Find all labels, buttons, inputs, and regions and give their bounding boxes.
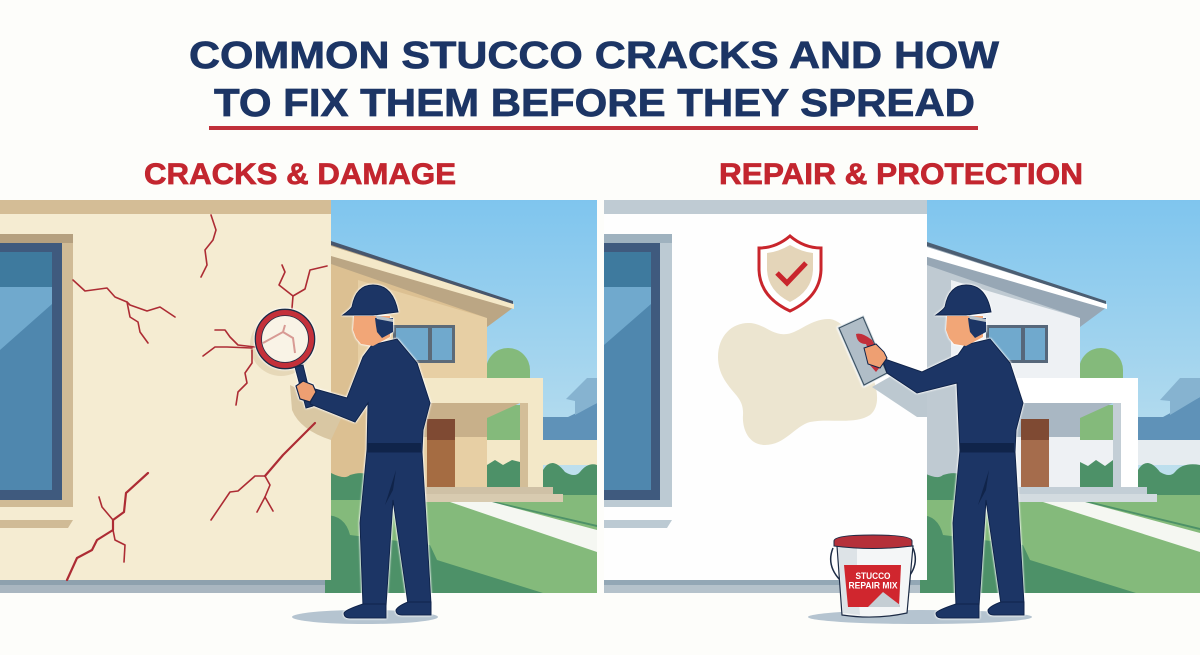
head	[353, 316, 390, 346]
panel: repair and protection	[604, 200, 1200, 624]
heading: repair and protection: REPAIR & PROTECTION	[719, 158, 1083, 191]
head	[946, 316, 983, 346]
icon: trowel	[839, 317, 887, 385]
worker with trowel	[839, 285, 1024, 618]
title: COMMON STUCCO CRACKS AND HOW	[189, 35, 999, 77]
background house scene right	[920, 200, 1200, 593]
window right	[604, 234, 672, 528]
applied patch	[718, 319, 877, 445]
window left	[0, 234, 73, 528]
icon: stucco repair mix bucket: STUCCO	[856, 571, 890, 581]
wall shadow from worker	[290, 385, 345, 440]
panel: cracks and damage	[0, 200, 597, 624]
worker with magnifying glass	[255, 285, 431, 618]
torso and arm	[882, 339, 1023, 452]
title: TO FIX THEM BEFORE THEY SPREAD	[214, 82, 975, 125]
cracks	[67, 215, 327, 580]
background house scene left	[325, 200, 597, 593]
legs	[953, 450, 1024, 606]
stucco wall left	[0, 200, 331, 580]
stucco wall right	[604, 200, 927, 580]
ground shadow right	[808, 610, 1032, 624]
ground shadow left	[292, 610, 438, 624]
legs	[360, 450, 431, 606]
hand	[864, 344, 887, 368]
heading: cracks and damage: CRACKS & DAMAGE	[144, 158, 456, 191]
icon: stucco repair mix bucket	[831, 535, 915, 617]
icon: magnifying glass	[255, 309, 315, 408]
torso and arm	[310, 339, 430, 452]
hand	[296, 381, 316, 402]
wall shadow from worker	[872, 375, 927, 417]
icon: stucco repair mix bucket: REPAIR MIX	[848, 580, 898, 590]
title	[189, 35, 999, 130]
icon: shield with check mark	[759, 236, 821, 311]
